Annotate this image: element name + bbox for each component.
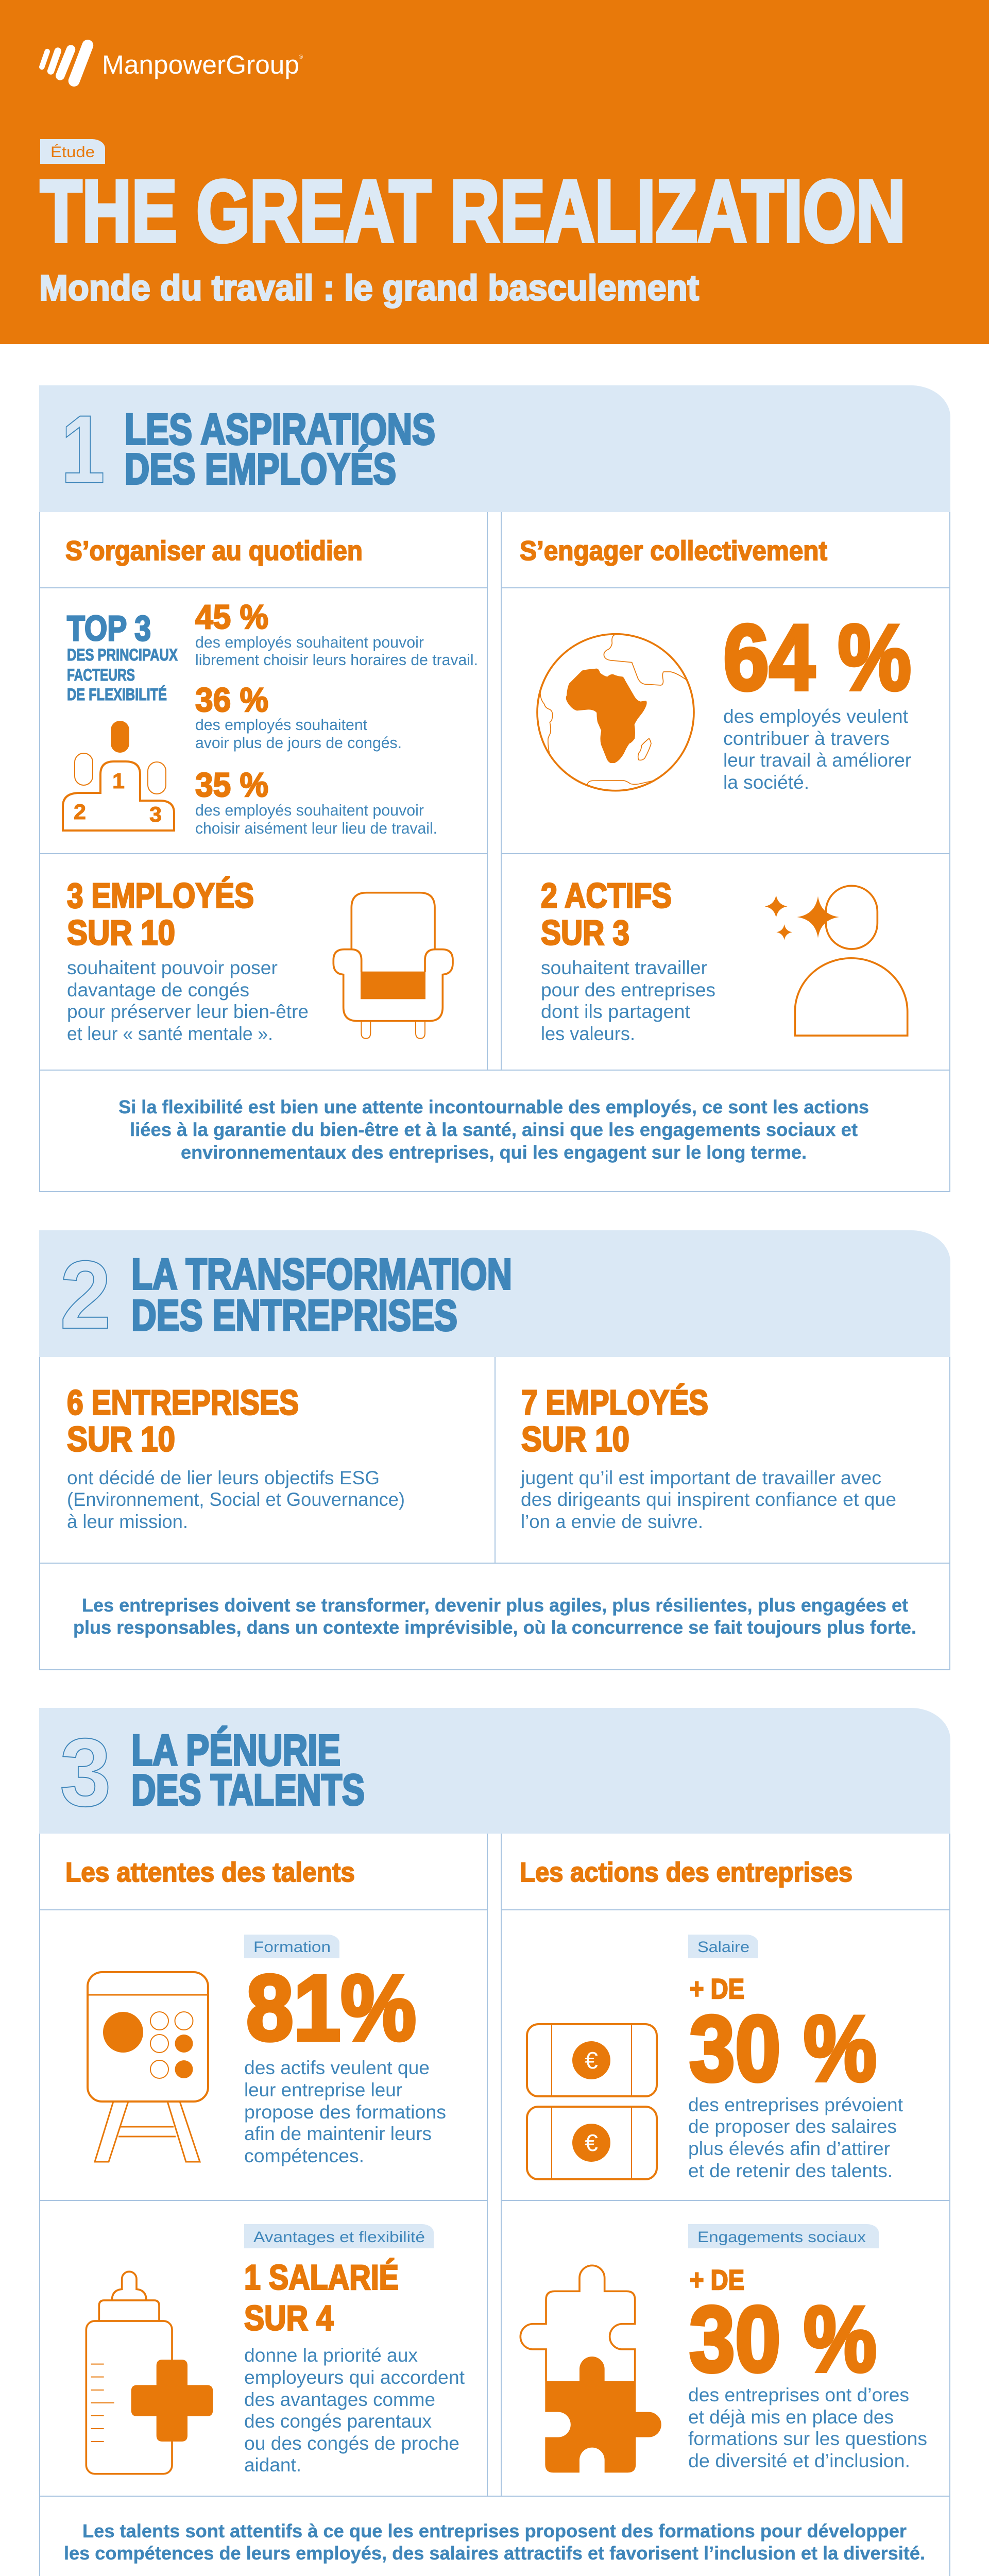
stat: 7 employés sur 10: des dirigeants qui inspirent confiance et que — [521, 1489, 896, 1510]
stat: 64 %: la société. — [723, 772, 809, 793]
stat: 2 actifs sur 3: les valeurs. — [541, 1023, 635, 1044]
conclusion box section 2: Les entreprises doivent se transformer, devenir plus agiles, plus résilientes, plus engagées et — [82, 1595, 908, 1616]
stat: salaire + de 30 % — [688, 1935, 903, 2181]
section 3 title: LA PÉNURIE — [131, 1726, 340, 1774]
conclusion box section 3 — [40, 2496, 950, 2576]
stat: engagements sociaux + de 30 %: 30 % — [689, 2287, 877, 2392]
panel: section 3 pénurie — [39, 1708, 950, 2576]
section 3 title: DES TALENTS — [131, 1766, 365, 1814]
icon: podium: 3 — [149, 802, 162, 826]
top 3 label: DE FLEXIBILITÉ — [67, 685, 167, 704]
tag: salaire — [688, 1935, 758, 1958]
section 2 header band — [39, 1230, 950, 1357]
stat: avantages 1 salarié sur 4: employeurs qui accordent — [244, 2367, 465, 2388]
icon: armchair — [333, 893, 453, 1039]
conclusion box section 1: liées à la garantie du bien-être et à la santé, ainsi que les engagements sociaux et — [130, 1119, 858, 1140]
icon: globe — [537, 634, 694, 791]
stat: 45 % — [195, 598, 478, 669]
stat: 2 actifs sur 3: dont ils partagent — [541, 1001, 691, 1022]
stat: salaire + de 30 %: et de retenir des talents. — [688, 2160, 893, 2181]
conclusion box section 3: Les talents sont attentifs à ce que les entreprises proposent des formations pour développer — [82, 2520, 907, 2541]
stat: 64 %: contribuer à travers — [723, 728, 890, 749]
tag: formation — [244, 1935, 339, 1958]
stat: 2 actifs sur 3: SUR 3 — [541, 913, 629, 952]
top 3 label: TOP 3 — [67, 608, 151, 648]
stat: 3 employés sur 10: et leur « santé mentale ». — [67, 1023, 273, 1044]
stat: salaire + de 30 %: des entreprises prévoient — [688, 2094, 903, 2115]
icon: person with stars — [765, 886, 908, 1036]
stat: 36 %: avoir plus de jours de congés. — [195, 734, 402, 752]
tag: formation: Formation — [253, 1939, 331, 1956]
stat: salaire + de 30 %: 30 % — [689, 1997, 877, 2101]
section number 3: 3 — [60, 1718, 111, 1826]
stat: salaire + de 30 %: de proposer des salaires — [688, 2116, 897, 2137]
stat: 2 actifs sur 3 — [541, 876, 715, 1044]
heading: les actions des entreprises: Les actions des entreprises — [520, 1857, 852, 1888]
stat: 7 employés sur 10: 7 EMPLOYÉS — [521, 1383, 708, 1422]
tag: engagements sociaux — [688, 2224, 879, 2248]
section 3 title — [131, 1726, 365, 1814]
stat: formation 81%: propose des formations — [244, 2102, 446, 2123]
stat: avantages 1 salarié sur 4 — [244, 2224, 465, 2476]
conclusion box section 3: les compétences de leurs employés, des salaires attractifs et favorisent l’inclusion et la diversité. — [64, 2543, 925, 2564]
stat: 64 %: 64 % — [723, 606, 911, 710]
conclusion box section 1: environnementaux des entreprises, qui les engagent sur le long terme. — [181, 1142, 807, 1163]
section 2 title: LA TRANSFORMATION — [131, 1250, 512, 1298]
icon: banknotes — [527, 2024, 657, 2179]
top 3 label: FACTEURS — [67, 666, 135, 684]
stat: 3 employés sur 10: SUR 10 — [67, 913, 175, 952]
heading: s'engager collectivement: S’engager collectivement — [520, 536, 827, 566]
stat: 6 entreprises sur 10: SUR 10 — [67, 1420, 175, 1459]
stat: 45 %: des employés souhaitent pouvoir — [195, 633, 424, 651]
stat: 3 employés sur 10 — [67, 876, 309, 1044]
stat: formation 81%: afin de maintenir leurs — [244, 2123, 432, 2144]
stat: 7 employés sur 10 — [520, 1383, 896, 1532]
stat: 6 entreprises sur 10: à leur mission. — [67, 1511, 188, 1532]
section 3 header band — [39, 1708, 950, 1834]
stat: 6 entreprises sur 10: 6 ENTREPRISES — [67, 1383, 299, 1422]
section 1 title: LES ASPIRATIONS — [125, 405, 435, 453]
logo: ManpowerGroup — [42, 45, 303, 81]
stat: 3 employés sur 10: 3 EMPLOYÉS — [67, 876, 254, 915]
stat: 64 %: leur travail à améliorer — [723, 750, 911, 771]
stat: 35 %: des employés souhaitent pouvoir — [195, 801, 424, 819]
icon: easel board — [88, 1972, 208, 2162]
stat: 3 employés sur 10: davantage de congés — [67, 979, 249, 1001]
header banner — [0, 0, 989, 344]
stat: 7 employés sur 10: jugent qu’il est important de travailler avec — [520, 1467, 881, 1488]
icon: baby bottle with cross — [86, 2272, 213, 2474]
stat: 64 %: des employés veulent — [723, 706, 909, 727]
conclusion box section 2 — [40, 1563, 950, 1670]
stat: 7 employés sur 10: l’on a envie de suivre. — [521, 1511, 703, 1532]
stat: 6 entreprises sur 10: ont décidé de lier leurs objectifs ESG — [67, 1467, 380, 1488]
stat: engagements sociaux + de 30 %: et déjà mis en place des — [688, 2406, 894, 2428]
stat: engagements sociaux + de 30 %: formations sur les questions — [688, 2428, 927, 2449]
stat: 35 %: choisir aisément leur lieu de travail. — [195, 819, 437, 837]
stat: avantages 1 salarié sur 4: 1 SALARIÉ — [244, 2258, 399, 2297]
stat: 6 entreprises sur 10 — [67, 1383, 405, 1532]
section 1 header band — [39, 385, 950, 512]
stat: avantages 1 salarié sur 4: SUR 4 — [244, 2299, 333, 2338]
heading: s'organiser au quotidien: S’organiser au quotidien — [65, 536, 363, 566]
stat: 36 %: des employés souhaitent — [195, 716, 367, 734]
subtitle: Monde du travail : le grand basculement — [39, 268, 699, 308]
stat: avantages 1 salarié sur 4: des congés parentaux — [244, 2411, 432, 2432]
stat: formation 81%: des actifs veulent que — [244, 2057, 430, 2078]
tag: salaire: Salaire — [697, 1939, 749, 1956]
stat: 64 % — [723, 606, 911, 793]
stat: avantages 1 salarié sur 4: ou des congés de proche — [244, 2433, 459, 2454]
icon: banknotes: € — [585, 2047, 598, 2074]
stat: 36 %: 36 % — [195, 681, 268, 719]
stat: formation 81%: compétences. — [244, 2145, 364, 2166]
conclusion box section 1: Si la flexibilité est bien une attente incontournable des employés, ce sont les actions — [118, 1096, 869, 1117]
stat: formation 81%: 81% — [246, 1956, 416, 2060]
top 3 label: DES PRINCIPAUX — [67, 646, 178, 664]
stat: engagements sociaux + de 30 %: des entreprises ont d’ores — [688, 2384, 909, 2405]
stat: 2 actifs sur 3: souhaitent travailler — [541, 957, 707, 978]
section 2 title — [131, 1250, 512, 1340]
stat: engagements sociaux + de 30 %: + DE — [690, 2264, 744, 2296]
stat: 36 % — [195, 681, 402, 752]
stat: 2 actifs sur 3: 2 ACTIFS — [541, 876, 672, 915]
icon: banknotes: € — [585, 2129, 598, 2156]
stat: formation 81% — [244, 1935, 446, 2166]
stat: 3 employés sur 10: souhaitent pouvoir poser — [67, 957, 278, 978]
stat: avantages 1 salarié sur 4: aidant. — [244, 2454, 301, 2476]
stat: 35 % — [195, 766, 437, 837]
section 1 title: DES EMPLOYÉS — [125, 445, 396, 493]
stat: 35 %: 35 % — [195, 766, 268, 804]
icon: puzzle — [520, 2265, 661, 2472]
icon: podium: 1 — [112, 769, 125, 793]
conclusion box section 1 — [40, 1070, 950, 1192]
stat: 2 actifs sur 3: pour des entreprises — [541, 979, 715, 1001]
logo: ManpowerGroup: ® — [299, 54, 303, 60]
stat: formation 81%: leur entreprise leur — [244, 2079, 402, 2100]
stat: avantages 1 salarié sur 4: des avantages comme — [244, 2389, 435, 2410]
section number 2: 2 — [60, 1241, 111, 1349]
stat: salaire + de 30 %: plus élevés afin d’attirer — [688, 2138, 890, 2159]
stat: 45 %: librement choisir leurs horaires de travail. — [195, 651, 478, 669]
stat: avantages 1 salarié sur 4: donne la priorité aux — [244, 2345, 418, 2366]
logo: ManpowerGroup: ManpowerGroup — [102, 50, 299, 79]
stat: engagements sociaux + de 30 % — [688, 2224, 927, 2471]
tag: engagements sociaux: Engagements sociaux — [697, 2229, 866, 2246]
icon: podium: 2 — [74, 800, 86, 824]
panel: section 1 aspirations — [39, 385, 950, 1192]
stat: engagements sociaux + de 30 %: de diversité et d’inclusion. — [688, 2450, 910, 2471]
stat: 45 %: 45 % — [195, 598, 268, 636]
section 2 title: DES ENTREPRISES — [131, 1291, 457, 1340]
tag: avantages et flexibilité: Avantages et flexibilité — [253, 2229, 425, 2246]
top 3 label — [67, 608, 178, 704]
section number 1: 1 — [61, 395, 105, 503]
section 1 title — [125, 405, 435, 493]
stat: salaire + de 30 %: + DE — [690, 1973, 744, 2005]
tag: étude — [40, 139, 105, 164]
stat: 6 entreprises sur 10: (Environnement, Social et Gouvernance) — [67, 1489, 405, 1510]
tag: avantages et flexibilité — [244, 2224, 434, 2248]
heading: les attentes des talents: Les attentes des talents — [65, 1857, 355, 1888]
stat: 7 employés sur 10: SUR 10 — [521, 1420, 629, 1459]
panel: section 2 transformation — [39, 1230, 950, 1670]
stat: 3 employés sur 10: pour préserver leur bien-être — [67, 1001, 309, 1022]
conclusion box section 2: plus responsables, dans un contexte imprévisible, où la concurrence se fait toujours plus forte. — [73, 1617, 916, 1638]
tag: étude: Étude — [50, 144, 95, 161]
icon: podium — [63, 721, 174, 831]
